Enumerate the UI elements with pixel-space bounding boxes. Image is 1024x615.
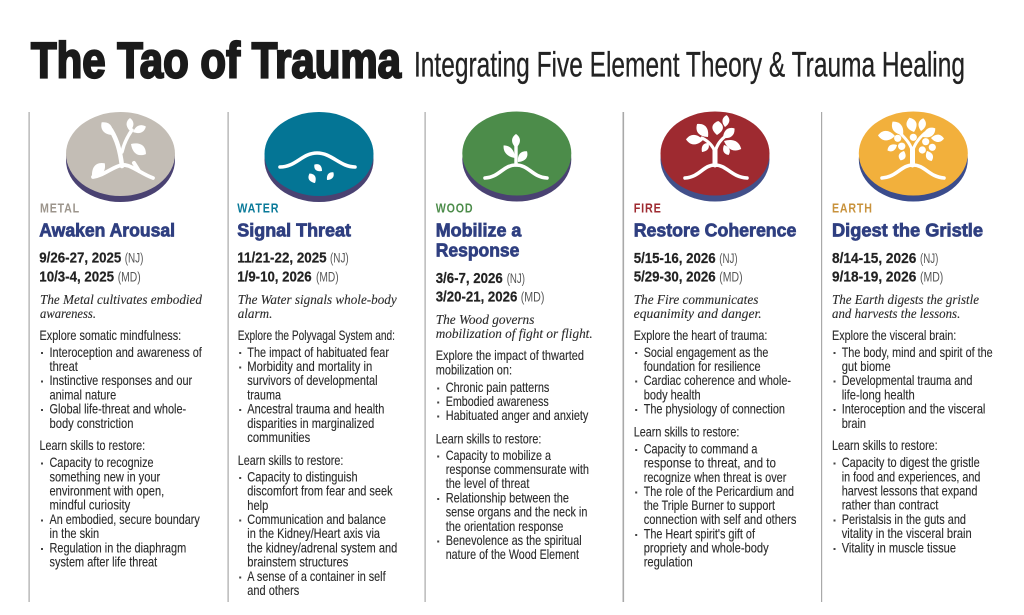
- explore list: metal: Interoception and awareness of: [50, 345, 202, 360]
- explore list: earth: Interoception and the visceral: [842, 402, 985, 416]
- dates: earth: (NJ): [920, 251, 938, 267]
- dates: earth: 8/14-15, 2026: [832, 251, 916, 267]
- title: The Tao of Trauma: [31, 32, 402, 88]
- skills list: water: Capacity to distinguish: [247, 470, 358, 484]
- dates: water: (MD): [316, 270, 339, 286]
- skills list: metal: Learn skills to restore:: [40, 438, 145, 453]
- explore list: fire: body health: [644, 388, 701, 402]
- explore list: water: Morbidity and mortality in: [247, 359, 372, 374]
- explore list: wood: mobilization on:: [436, 362, 512, 378]
- skills list: metal: environment with open,: [50, 484, 164, 498]
- intro: water: The Water signals whole-body: [238, 292, 397, 307]
- skills list: metal: Regulation in the diaphragm: [50, 540, 186, 556]
- dates: water: 11/21-22, 2025: [237, 251, 327, 267]
- intro: earth: [832, 292, 979, 321]
- intro: earth: and harvests the lessons.: [832, 306, 960, 321]
- heading: mobilize a response: Response: [436, 240, 519, 261]
- skills list: fire: Learn skills to restore:: [634, 424, 739, 440]
- heading: awaken arousal: Awaken Arousal: [39, 220, 175, 241]
- heading: mobilize a response: Mobilize a: [436, 220, 522, 241]
- explore list: water: disparities in marginalized: [247, 416, 374, 431]
- skills list: wood: nature of the Wood Element: [446, 547, 579, 562]
- intro: fire: equanimity and danger.: [634, 306, 762, 321]
- dates: metal: 9/26-27, 2025: [39, 251, 121, 267]
- explore list: earth: [832, 328, 993, 431]
- skills list: fire: [634, 424, 797, 570]
- skills list: fire: The role of the Pericardium and: [644, 484, 794, 499]
- intro: water: alarm.: [238, 306, 272, 321]
- dates: earth: [832, 251, 943, 286]
- explore list: water: survivors of developmental: [247, 373, 378, 388]
- dates: wood: (MD): [521, 290, 544, 306]
- intro: fire: The Fire communicates: [634, 292, 758, 307]
- dates: earth: 9/18-19, 2026: [832, 270, 916, 286]
- skills list: fire: The Heart spirit's gift of: [644, 526, 755, 542]
- skills list: earth: rather than contract: [842, 498, 939, 513]
- dates: earth: (MD): [920, 270, 943, 286]
- explore list: earth: life-long health: [842, 388, 915, 402]
- explore list: water: Ancestral trauma and health: [247, 402, 384, 416]
- explore list: earth: gut biome: [842, 359, 891, 374]
- element label: water: WATER: [237, 201, 279, 216]
- skills list: earth: vitality in the visceral brain: [842, 526, 972, 541]
- skills list: water: in the Kidney/Heart axis via: [247, 526, 380, 541]
- panel: wood: [436, 112, 593, 562]
- skills list: metal: Capacity to recognize: [50, 455, 154, 470]
- skills list: wood: the level of threat: [446, 476, 530, 491]
- icon: fire: [660, 112, 770, 202]
- skills list: wood: Benevolence as the spiritual: [446, 533, 582, 548]
- skills list: water: Learn skills to restore:: [238, 453, 343, 468]
- heading: digest the gristle: Digest the Gristle: [832, 220, 983, 241]
- skills list: water: help: [247, 498, 268, 513]
- explore list: earth: Explore the visceral brain:: [832, 328, 956, 343]
- explore list: fire: foundation for resilience: [644, 359, 761, 374]
- element label: fire: FIRE: [634, 201, 662, 216]
- panel: metal: [39, 112, 202, 570]
- icon: earth: [859, 112, 968, 202]
- skills list: water: Communication and balance: [247, 512, 386, 527]
- panel: fire: [634, 112, 797, 570]
- dates: wood: [436, 271, 544, 306]
- skills list: metal: mindful curiosity: [50, 498, 130, 513]
- intro: wood: [436, 312, 593, 341]
- intro: fire: [634, 292, 762, 321]
- explore list: metal: [40, 328, 202, 431]
- skills list: fire: recognize when threat is over: [644, 470, 787, 485]
- explore list: water: trauma: [247, 388, 281, 402]
- skills list: water: A sense of a container in self: [247, 569, 386, 584]
- explore list: metal: threat: [50, 359, 78, 374]
- explore list: wood: Habituated anger and anxiety: [446, 408, 589, 423]
- dates: water: (NJ): [330, 251, 349, 267]
- explore list: metal: Instinctive responses and our: [50, 373, 193, 388]
- explore list: water: [238, 328, 395, 445]
- skills list: wood: sense organs and the neck in: [446, 504, 587, 520]
- explore list: wood: [436, 348, 589, 423]
- explore list: water: communities: [247, 430, 310, 445]
- skills list: earth: Learn skills to restore:: [832, 438, 938, 453]
- intro: wood: The Wood governs: [436, 312, 534, 327]
- skills list: water: and others: [247, 583, 299, 598]
- skills list: wood: the orientation response: [446, 519, 563, 534]
- skills list: fire: regulation: [644, 554, 693, 570]
- element label: wood: WOOD: [436, 201, 473, 216]
- explore list: fire: Social engagement as the: [644, 345, 768, 360]
- explore list: fire: [634, 328, 791, 416]
- dates: metal: (NJ): [125, 251, 143, 267]
- intro: metal: [40, 292, 202, 321]
- explore list: metal: Global life-threat and whole-: [50, 402, 186, 416]
- heading: signal threat: Signal Threat: [237, 220, 351, 241]
- dates: wood: (NJ): [507, 271, 525, 287]
- skills list: fire: response to threat, and to: [644, 456, 776, 470]
- skills list: earth: Vitality in muscle tissue: [842, 540, 956, 556]
- dates: wood: 3/20-21, 2026: [436, 290, 517, 306]
- skills list: wood: Capacity to mobilize a: [446, 448, 551, 463]
- skills list: fire: propriety and whole-body: [644, 540, 769, 556]
- intro: earth: The Earth digests the gristle: [832, 292, 979, 307]
- skills list: wood: Learn skills to restore:: [436, 432, 541, 446]
- explore list: earth: Developmental trauma and: [842, 373, 972, 388]
- skills list: water: [238, 453, 397, 598]
- skills list: fire: the Triple Burner to support: [644, 498, 775, 513]
- explore list: metal: Explore somatic mindfulness:: [40, 328, 181, 343]
- skills list: fire: Capacity to command a: [644, 442, 758, 456]
- skills list: earth: [832, 438, 980, 556]
- skills list: water: the kidney/adrenal system and: [247, 540, 397, 556]
- skills list: wood: response commensurate with: [446, 462, 589, 477]
- skills list: metal: something new in your: [50, 470, 161, 484]
- dates: wood: 3/6-7, 2026: [436, 271, 503, 287]
- dates: metal: (MD): [118, 270, 141, 286]
- intro: metal: The Metal cultivates embodied: [40, 292, 202, 307]
- intro: water: [238, 292, 397, 321]
- explore list: wood: Embodied awareness: [446, 394, 549, 409]
- skills list: metal: [40, 438, 200, 570]
- skills list: earth: Capacity to digest the gristle: [842, 455, 980, 470]
- skills list: earth: in food and experiences, and: [842, 470, 980, 484]
- skills list: water: discomfort from fear and seek: [247, 484, 393, 498]
- explore list: fire: The physiology of connection: [644, 402, 785, 416]
- dates: water: 1/9-10, 2026: [237, 270, 312, 286]
- dates: fire: 5/15-16, 2026: [634, 251, 716, 267]
- explore list: fire: Explore the heart of trauma:: [634, 328, 767, 343]
- heading: restore coherence: Restore Coherence: [634, 220, 796, 241]
- skills list: wood: Relationship between the: [446, 490, 569, 506]
- panel: water: [237, 112, 397, 598]
- dates: metal: 10/3-4, 2025: [39, 270, 114, 286]
- element label: earth: EARTH: [832, 201, 873, 216]
- explore list: earth: brain: [842, 416, 866, 431]
- dates: water: [237, 251, 349, 286]
- icon: wood: [462, 112, 571, 202]
- skills list: metal: An embodied, secure boundary: [50, 512, 200, 527]
- dates: fire: (NJ): [719, 251, 738, 267]
- panel: earth: [832, 112, 993, 556]
- explore list: wood: Explore the impact of thwarted: [436, 348, 584, 363]
- dates: fire: 5/29-30, 2026: [634, 270, 716, 286]
- skills list: earth: harvest lessons that expand: [842, 484, 977, 498]
- intro: metal: awareness.: [40, 306, 96, 321]
- explore list: fire: Cardiac coherence and whole-: [644, 373, 791, 388]
- heading: mobilize a response: [436, 220, 522, 261]
- explore list: metal: body constriction: [50, 416, 134, 431]
- skills list: metal: system after life threat: [50, 554, 157, 570]
- skills list: metal: in the skin: [50, 526, 99, 541]
- intro: wood: mobilization of fight or flight.: [436, 326, 593, 341]
- explore list: wood: Chronic pain patterns: [446, 380, 550, 395]
- skills list: earth: Peristalsis in the guts and: [842, 512, 966, 527]
- dates: fire: [634, 251, 743, 286]
- explore list: water: Explore the Polyvagal System and:: [238, 328, 395, 343]
- explore list: water: The impact of habituated fear: [247, 345, 389, 360]
- skills list: fire: connection with self and others: [644, 512, 797, 527]
- dates: metal: [39, 251, 143, 286]
- explore list: metal: animal nature: [50, 388, 116, 402]
- element label: metal: METAL: [40, 201, 80, 216]
- icon: metal: [66, 112, 175, 202]
- skills list: wood: [436, 432, 589, 562]
- skills list: water: brainstem structures: [247, 554, 348, 570]
- icon: water: [264, 112, 374, 202]
- dates: fire: (MD): [719, 270, 743, 286]
